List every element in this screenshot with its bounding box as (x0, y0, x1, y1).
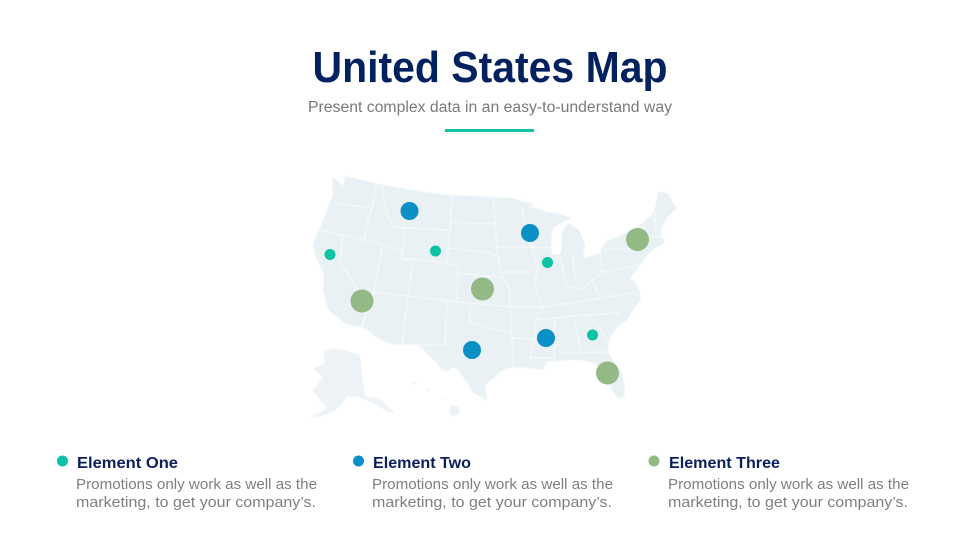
legend: Element Two (353, 455, 613, 511)
legend: Element Three: Element Three (669, 455, 780, 472)
legend: Element Three (648, 455, 909, 511)
legend: Element Two: Promotions only work as well as the (372, 476, 613, 493)
markers: blue (400, 202, 555, 359)
legend: Element One (57, 455, 317, 511)
Hawaii (411, 382, 461, 417)
Alaska (307, 348, 395, 420)
markers: teal (324, 246, 598, 340)
contiguous states (313, 176, 677, 400)
legend: Element One: Promotions only work as well as the (76, 476, 317, 493)
legend: Element Three: marketing, to get your company’s. (668, 494, 908, 511)
map: United States (307, 176, 677, 420)
title underline (445, 129, 534, 132)
legend: Element One: marketing, to get your company’s. (76, 494, 316, 511)
legend: Element Two: Element Two (373, 455, 471, 472)
markers: green (350, 228, 649, 384)
state borders (318, 183, 664, 367)
subtitle: Present complex data in an easy-to-understand way (308, 99, 672, 116)
legend: Element Two: marketing, to get your company’s. (372, 494, 612, 511)
legend: Element Three: Promotions only work as well as the (668, 476, 909, 493)
legend: Element One: Element One (77, 455, 178, 472)
title: United States Map (312, 43, 668, 92)
